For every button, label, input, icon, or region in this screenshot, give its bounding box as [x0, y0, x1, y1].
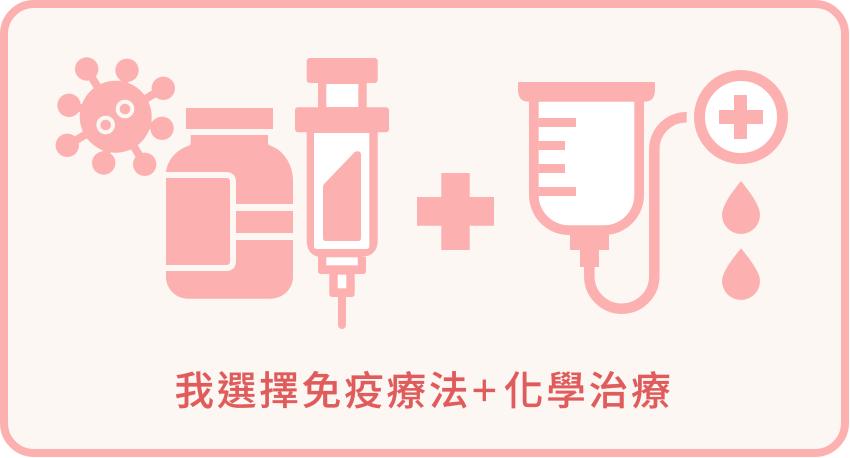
title: +	[472, 366, 497, 415]
icon: IV drip bag	[518, 82, 687, 309]
icon: virus	[56, 57, 175, 176]
icon: upper drop	[722, 181, 760, 234]
icon: medical cross circle	[700, 76, 782, 158]
icon: syringe	[295, 58, 389, 329]
title: 我選擇免疫療法	[174, 370, 468, 414]
icon: medicine bottle	[166, 108, 294, 299]
icon: plus sign	[417, 173, 494, 250]
icon: lower drop	[722, 248, 760, 300]
title: 化學治療	[504, 370, 671, 414]
